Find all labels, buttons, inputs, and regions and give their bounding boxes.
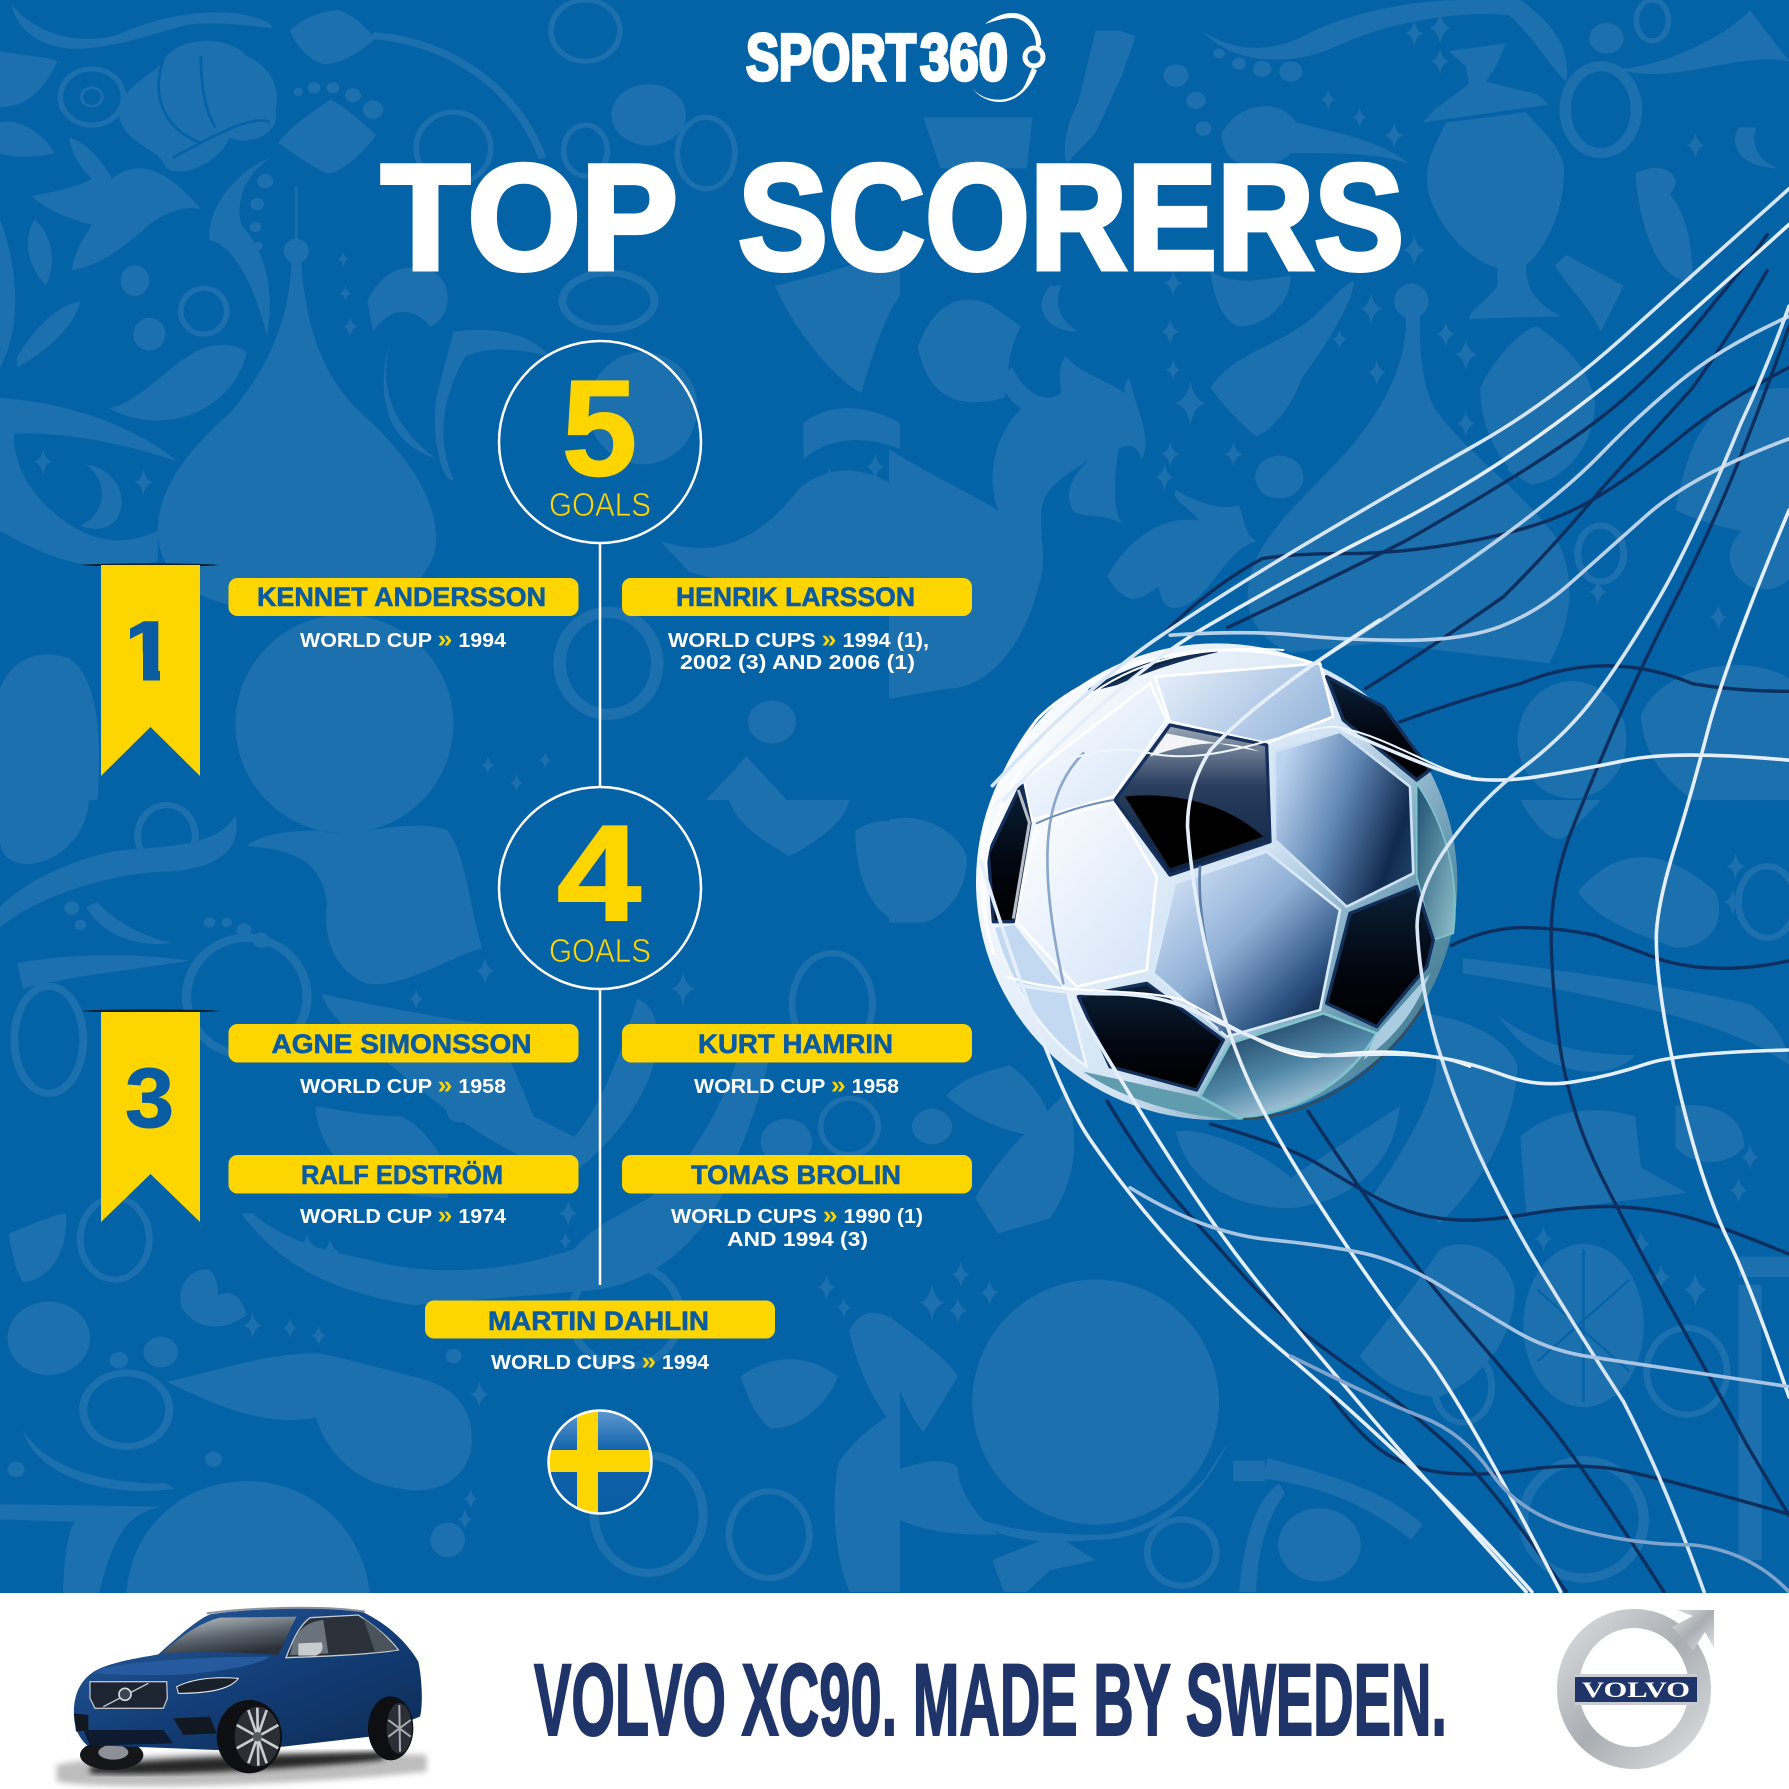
ball panels xyxy=(993,663,1455,1120)
player: Agne Simonsson: AGNE SIMONSSON xyxy=(272,1029,532,1059)
football xyxy=(976,643,1470,1120)
player: Kurt Hamrin xyxy=(622,1024,972,1099)
player: Ralf Edström: WORLD CUP » 1974 xyxy=(300,1201,507,1229)
ornaments: bottom right xyxy=(889,800,1789,1592)
player: Kennet Andersson: WORLD CUP » 1994 xyxy=(300,625,507,653)
player: Kurt Hamrin: KURT HAMRIN xyxy=(698,1029,893,1059)
goal net: dark strands behind ball xyxy=(1107,235,1789,1592)
logo: Sport 360 xyxy=(746,13,1043,102)
roof rail xyxy=(207,1608,365,1613)
logo: Volvo xyxy=(1557,1609,1714,1769)
ribbon: rank 3 xyxy=(82,1009,218,1222)
player: Henrik Larsson xyxy=(622,578,972,674)
car shadow xyxy=(57,1752,427,1786)
ribbon: rank 3: 3 xyxy=(125,1051,174,1145)
ball lower-right rim shadow xyxy=(1243,1007,1423,1119)
goal net: pale strands in front of ball xyxy=(981,189,1789,1592)
player: Henrik Larsson: WORLD CUPS » 1994 (1), xyxy=(668,625,929,653)
mirror xyxy=(298,1642,323,1656)
player: Martin Dahlin xyxy=(425,1300,775,1375)
front wheel xyxy=(217,1700,282,1773)
logo: Volvo: VOLVO xyxy=(1582,1677,1690,1702)
title: TOP xyxy=(381,133,678,301)
ornaments: top left xyxy=(0,0,900,833)
car body xyxy=(74,1608,422,1750)
player: Ralf Edström xyxy=(228,1155,578,1229)
player: Agne Simonsson xyxy=(228,1024,578,1099)
player: Martin Dahlin: MARTIN DAHLIN xyxy=(488,1306,709,1336)
windshield xyxy=(162,1617,297,1655)
ribbon: rank 1: 1 xyxy=(119,604,177,698)
grille xyxy=(90,1682,167,1708)
car: Volvo XC90 xyxy=(57,1608,427,1786)
icon: Swedish flag xyxy=(547,1409,653,1515)
side windows xyxy=(286,1615,398,1658)
sponsor banner xyxy=(0,1593,1789,1789)
badge: 4 goals: GOALS xyxy=(549,932,651,969)
player: Henrik Larsson: 2002 (3) AND 2006 (1) xyxy=(680,652,915,674)
far wheel xyxy=(80,1740,143,1770)
title: SCORERS xyxy=(738,133,1404,301)
player: Ralf Edström: RALF EDSTRÖM xyxy=(301,1160,503,1190)
player: Tomas Brolin: AND 1994 (3) xyxy=(727,1229,868,1251)
player: Tomas Brolin xyxy=(622,1155,972,1251)
player: Agne Simonsson: WORLD CUP » 1958 xyxy=(300,1071,506,1099)
intakes xyxy=(83,1730,173,1746)
player: Kurt Hamrin: WORLD CUP » 1958 xyxy=(694,1071,899,1099)
ribbon: rank 1 xyxy=(82,563,218,776)
car hood highlight xyxy=(93,1657,270,1675)
badge: 5 goals: 5 xyxy=(562,352,637,504)
player: Henrik Larsson: HENRIK LARSSON xyxy=(676,582,915,612)
title xyxy=(381,133,1404,301)
rear wheel xyxy=(368,1696,413,1760)
badge: 4 goals xyxy=(549,797,651,969)
player: Martin Dahlin: WORLD CUPS » 1994 xyxy=(491,1347,710,1375)
player: Kennet Andersson: KENNET ANDERSSON xyxy=(257,582,546,612)
player: Tomas Brolin: WORLD CUPS » 1990 (1) xyxy=(671,1201,923,1229)
badge: 4 goals: 4 xyxy=(557,797,641,949)
badge: 5 goals xyxy=(549,352,651,523)
logo: Sport 360: SPORT xyxy=(746,20,916,94)
ornaments: bottom left xyxy=(0,800,900,1600)
ball body xyxy=(976,643,1457,1120)
player: Tomas Brolin: TOMAS BROLIN xyxy=(691,1160,901,1190)
ball net strands over ball xyxy=(982,649,1470,1067)
logo: Sport 360: 360 xyxy=(920,20,1008,94)
player: Kennet Andersson xyxy=(228,578,578,653)
badge: 5 goals: GOALS xyxy=(549,486,651,523)
headlight xyxy=(177,1678,238,1693)
ornaments: top right xyxy=(889,0,1789,800)
timeline xyxy=(499,341,701,1285)
ball black patches xyxy=(988,651,1433,1090)
